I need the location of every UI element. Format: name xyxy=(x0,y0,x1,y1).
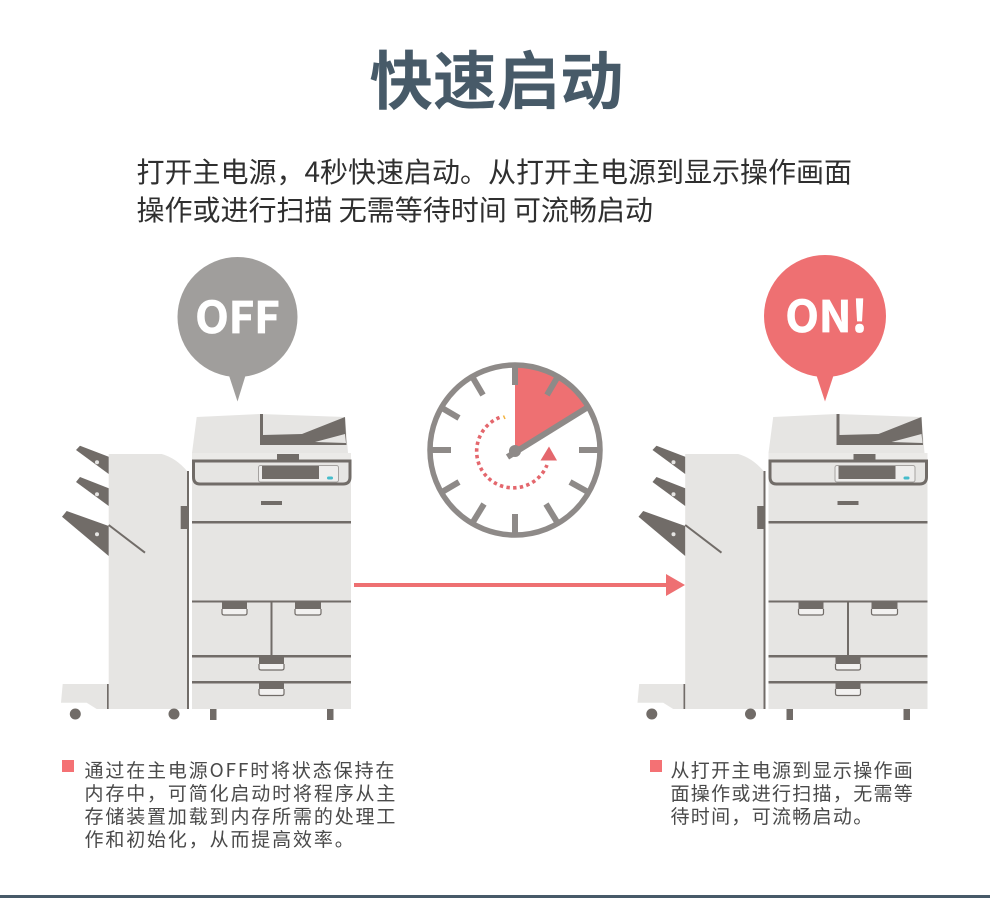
arrow xyxy=(354,574,685,596)
printer: off state xyxy=(61,414,351,720)
intro text xyxy=(136,151,852,229)
speech bubble: OFF: OFF xyxy=(195,283,280,346)
title: 快速启动 xyxy=(370,31,624,123)
printer: on state xyxy=(638,414,928,720)
speech bubble: ON: ON! xyxy=(785,282,868,345)
bullet: right note xyxy=(650,760,662,772)
intro text: 打开主电源，4秒快速启动。从打开主电源到显示操作画面 xyxy=(136,151,852,191)
intro text: 操作或进行扫描 无需等待时间 可流畅启动 xyxy=(136,189,653,229)
note: left xyxy=(84,756,397,852)
note: right: 面操作或进行扫描，无需等 xyxy=(670,778,914,806)
bottom rule xyxy=(0,895,990,898)
note: left: 通过在主电源OFF时将状态保持在 xyxy=(84,756,396,782)
speech bubble: OFF xyxy=(178,257,298,402)
clock icon xyxy=(430,365,600,535)
note: left: 内存中，可简化启动时将程序从主 xyxy=(84,778,397,806)
note: left: 作和初始化，从而提高效率。 xyxy=(84,824,356,852)
note: left: 存储装置加载到内存所需的处理工 xyxy=(84,802,397,828)
bullet: left note xyxy=(62,760,74,772)
speech bubble: ON xyxy=(764,255,886,402)
note: right: 从打开主电源到显示操作画 xyxy=(670,756,914,782)
note: right xyxy=(670,756,914,828)
note: right: 待时间，可流畅启动。 xyxy=(670,802,874,828)
